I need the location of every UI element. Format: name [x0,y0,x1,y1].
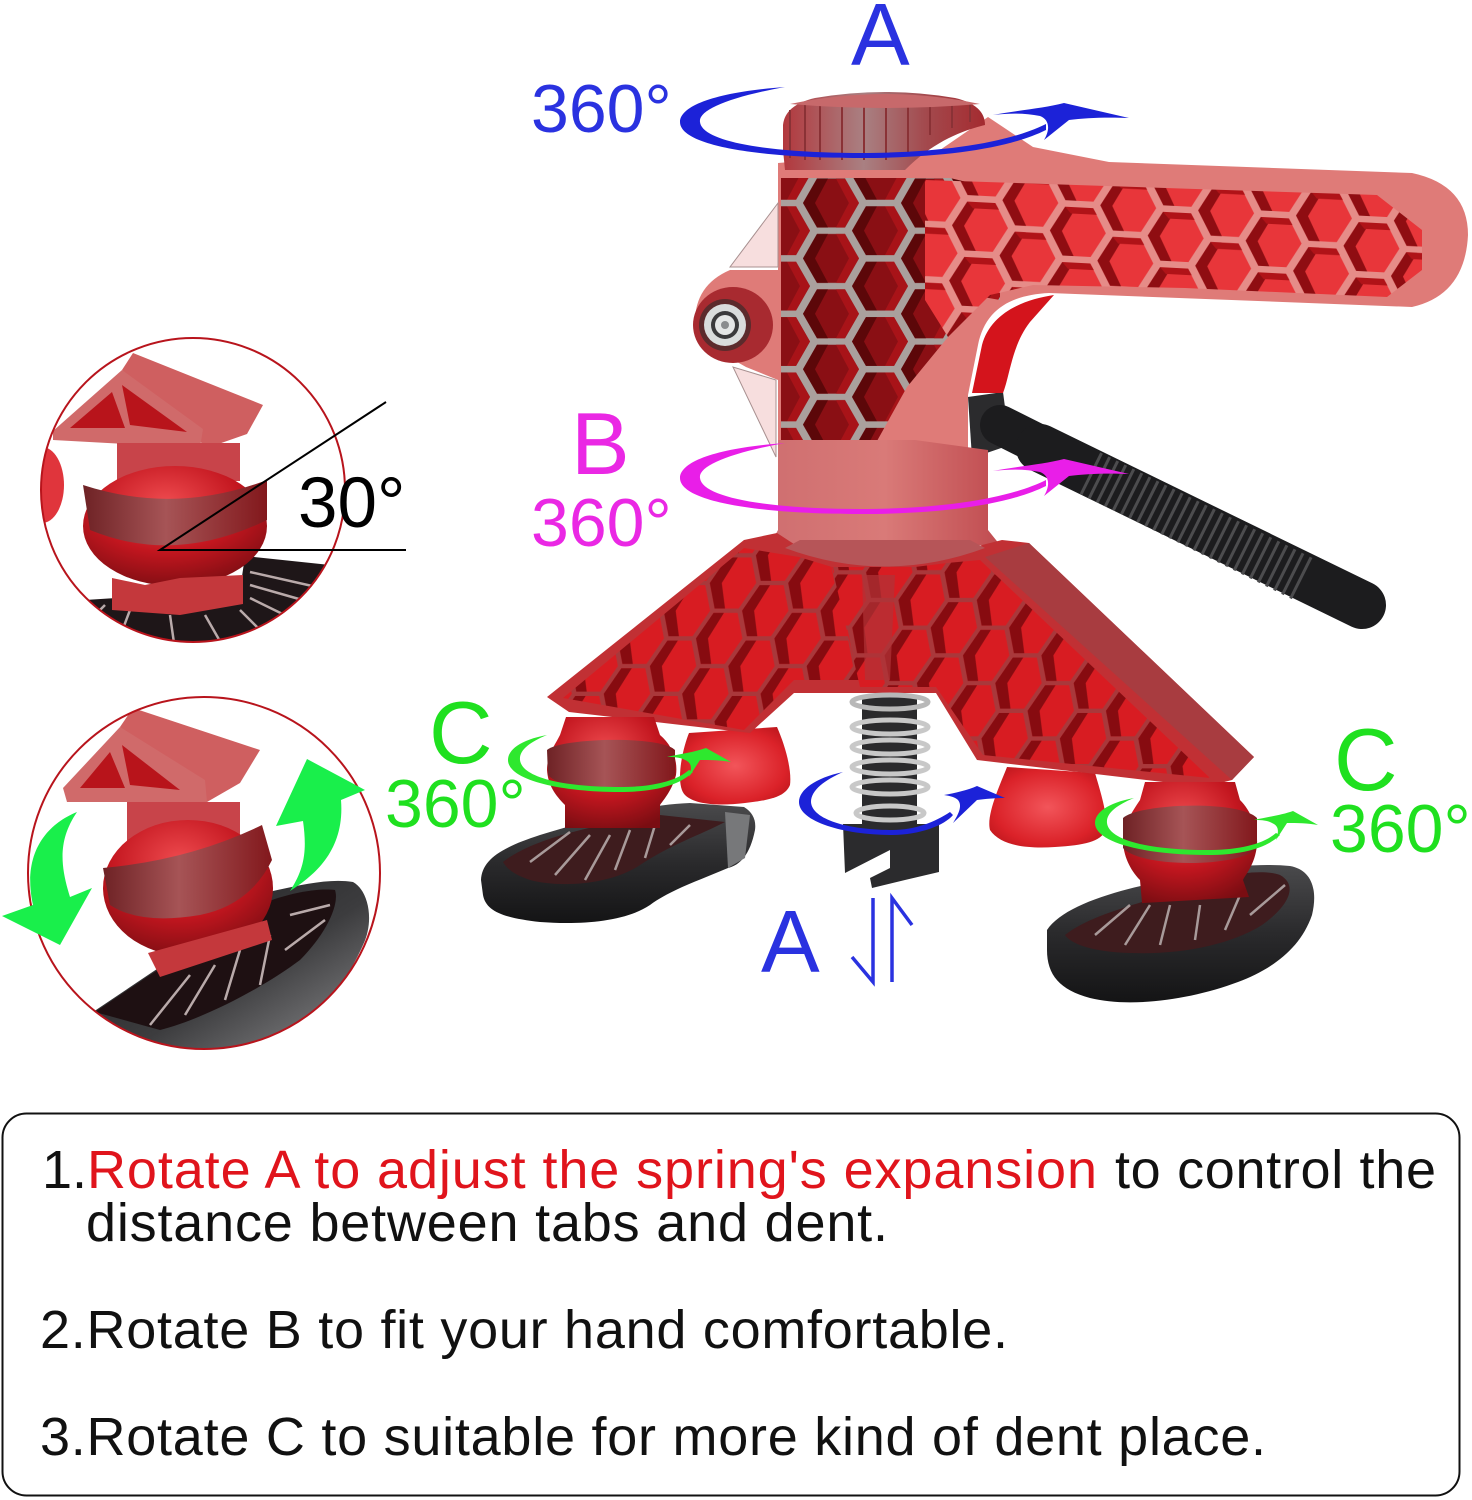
rotation label B [531,394,1129,561]
threaded bolt [968,392,1362,605]
label A with up-down arrows [761,892,912,991]
rotation label A top: 360° [531,71,672,147]
inner foot left [680,727,790,804]
spring rotation arrow A [799,772,1005,835]
step 1: 1. [42,1140,87,1200]
inset: 30 degree tilt: 30° [298,464,405,543]
rotation label C left [385,683,731,842]
spring and tip [843,695,939,888]
instructions panel [2,1114,1460,1496]
left foot [481,717,755,923]
inset: tilt arrows [2,697,380,1057]
red inner arch [972,295,1054,393]
step 1: Rotate A to adjust the spring's expansion [87,1140,1097,1200]
label A with up-down arrows: A [761,892,820,991]
rotation label C right [1095,710,1471,867]
inset: 30 degree tilt [20,338,406,650]
inner foot right [989,767,1106,847]
rotation label C left: C [429,683,493,782]
right foot [1047,782,1314,1002]
step 3: 3.Rotate C to suitable for more kind of dent place. [40,1407,1266,1467]
step 1 [42,1140,1436,1253]
step 2: 2.Rotate B to fit your hand comfortable. [40,1300,1008,1360]
base arms [547,533,1254,787]
dent puller tool [481,92,1468,1002]
rotation label B: B [571,394,630,493]
rotation label C right: 360° [1330,791,1471,867]
green arrow: left [2,812,92,945]
rotation label C right: C [1334,710,1398,809]
collar B [770,440,1000,545]
body and handle shell [695,117,1468,457]
rotation label B: 360° [531,485,672,561]
side bearing [693,287,773,363]
step 1: to control the [1115,1140,1436,1200]
rotation label C left: 360° [385,766,526,842]
step 1: distance between tabs and dent. [86,1193,888,1253]
rotation label A top [531,0,1129,158]
green arrow: right [276,759,365,891]
knob A [783,92,985,170]
